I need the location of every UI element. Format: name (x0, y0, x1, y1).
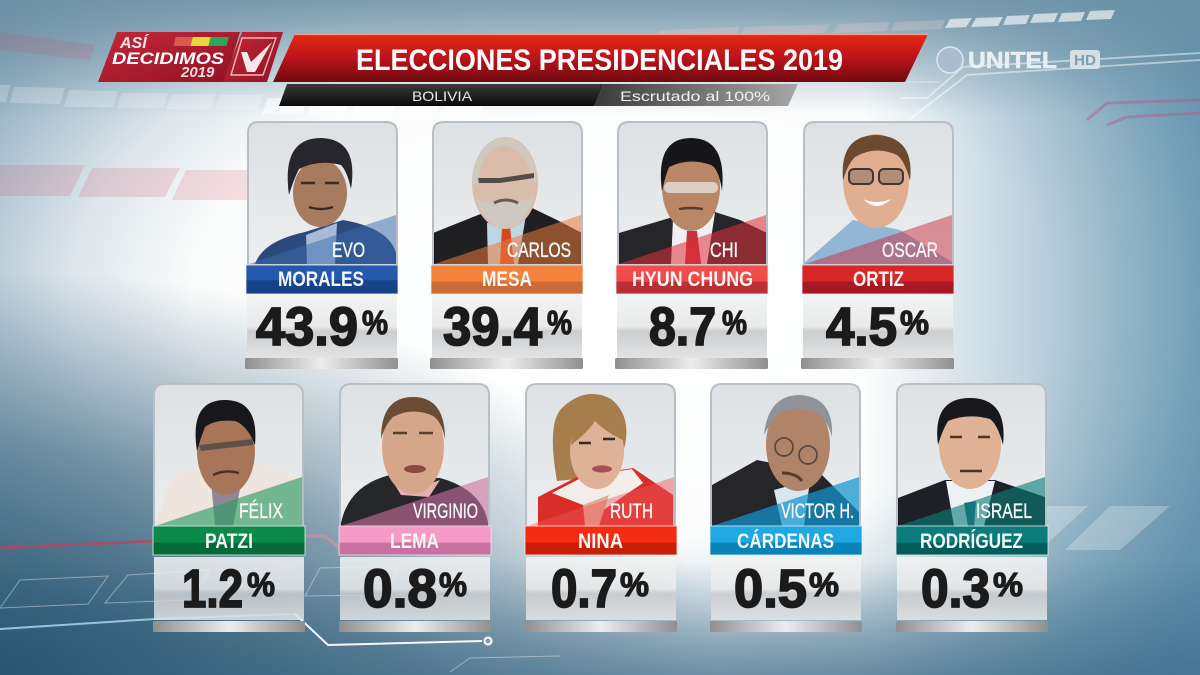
result: % (809, 566, 839, 603)
logo: Unitel HD: UNITEL (968, 47, 1057, 73)
surname bar (896, 526, 1048, 555)
surname bar (339, 526, 491, 555)
logo: Unitel HD (937, 47, 1100, 73)
logo: check mark box (223, 32, 283, 82)
candidate card: Evo Morales (245, 122, 398, 369)
subtitle strip: Escrutado al 100%: Escrutado al 100% (620, 88, 770, 104)
surname bar: ORTIZ (853, 268, 904, 291)
result: 8.7 (649, 297, 716, 357)
result (617, 295, 767, 358)
result: 1.2 (182, 559, 243, 619)
result: % (900, 304, 929, 341)
result: 39.4 (443, 297, 542, 357)
subtitle strip: Escrutado al 100% (594, 84, 798, 106)
surname bar (431, 265, 583, 294)
portrait: Morales (249, 138, 396, 264)
result (154, 557, 304, 620)
logo: Así Decidimos 2019 (98, 32, 240, 82)
candidate card: Félix Patzi (153, 384, 305, 632)
base bar (525, 621, 677, 632)
result (247, 295, 397, 358)
first name: FÉLIX (239, 500, 283, 523)
portrait: Ortiz (805, 134, 952, 264)
surname bar: LEMA (390, 530, 439, 553)
result: 4.5 (826, 297, 897, 357)
result: 43.9 (256, 297, 358, 357)
portrait: Mesa (433, 137, 582, 264)
portrait: Chung (619, 138, 767, 264)
result (526, 557, 676, 620)
result: 0.8 (363, 559, 437, 619)
result (340, 557, 490, 620)
result (803, 295, 953, 358)
result: % (620, 566, 649, 603)
surname bar: MORALES (278, 268, 364, 291)
portrait: Cárdenas (712, 395, 860, 526)
first name: CARLOS (507, 239, 571, 262)
candidate card: Israel Rodríguez (896, 384, 1048, 632)
first name: VIRGINIO (413, 500, 478, 523)
surname bar (525, 526, 677, 555)
base bar (710, 621, 862, 632)
surname bar (153, 526, 305, 555)
base bar (153, 621, 305, 632)
subtitle strip: Bolivia (279, 84, 604, 106)
result: 0.5 (734, 559, 807, 619)
logo: Así Decidimos 2019: 2019 (180, 64, 215, 81)
surname bar (802, 265, 954, 294)
surname bar: CÁRDENAS (737, 530, 834, 553)
portrait: Lema (341, 397, 488, 526)
surname bar: HYUN CHUNG (632, 268, 753, 291)
surname bar (616, 265, 768, 294)
portrait: Rodríguez (898, 398, 1045, 526)
title banner (273, 34, 928, 82)
result: % (362, 304, 388, 341)
candidate card: Ruth Nina (525, 384, 677, 632)
first name: CHI (710, 239, 738, 262)
base bar (896, 621, 1048, 632)
candidate card: Virginio Lema (339, 384, 491, 632)
base bar (801, 358, 954, 369)
base bar (245, 358, 398, 369)
result: % (722, 304, 747, 341)
result: % (439, 566, 467, 603)
result (897, 557, 1047, 620)
surname bar: MESA (482, 268, 532, 291)
first name: ISRAEL (976, 500, 1032, 523)
first name: EVO (332, 239, 365, 262)
surname bar (246, 265, 398, 294)
result: 0.7 (551, 559, 617, 619)
first name: VICTOR H. (781, 500, 854, 523)
portrait: Patzi (155, 400, 302, 526)
surname bar: PATZI (205, 530, 253, 553)
candidate card: Carlos Mesa (430, 122, 583, 369)
result (432, 295, 582, 358)
base bar (430, 358, 583, 369)
portrait: Nina (527, 394, 674, 526)
result (711, 557, 861, 620)
subtitle strip: Bolivia: BOLIVIA (412, 88, 473, 104)
base bar (339, 621, 491, 632)
result: % (547, 304, 572, 341)
surname bar (710, 526, 862, 555)
result: % (247, 566, 275, 603)
first name: OSCAR (882, 239, 938, 262)
title banner: ELECCIONES PRESIDENCIALES 2019 (356, 44, 843, 77)
candidate card: Oscar Ortiz (801, 122, 954, 369)
first name: RUTH (610, 500, 653, 523)
base bar (615, 358, 768, 369)
logo: Unitel HD: HD (1074, 52, 1096, 69)
logo: Así Decidimos 2019: DECIDIMOS (112, 49, 225, 68)
candidate card: Chi Hyun Chung (615, 122, 768, 369)
surname bar: NINA (578, 530, 623, 553)
surname bar: RODRÍGUEZ (920, 530, 1023, 553)
logo: Así Decidimos 2019: ASÍ (119, 33, 149, 52)
result: 0.3 (921, 559, 990, 619)
candidate card: Victor H. Cárdenas (710, 384, 862, 632)
result: % (993, 566, 1023, 603)
